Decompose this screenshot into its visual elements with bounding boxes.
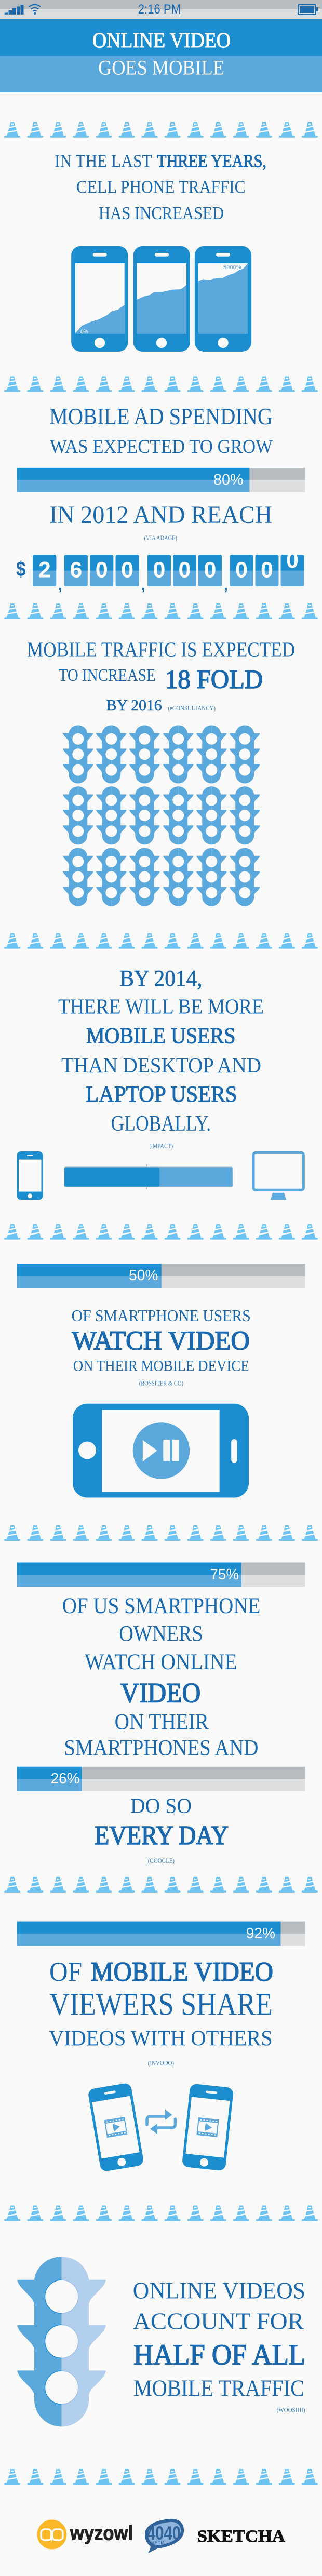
heading: by 2014: LAPTOP USERS bbox=[86, 1082, 237, 1107]
progress bar 80% bbox=[17, 468, 305, 492]
heading: by 2014: MOBILE USERS bbox=[86, 1024, 236, 1048]
counter: $2,600,000,000: 0 bbox=[204, 558, 216, 583]
text: half of all mobile traffic: ACCOUNT FOR bbox=[133, 2308, 304, 2334]
progress bar 50% bbox=[17, 1264, 305, 1288]
counter: $2,600,000,000: 6 bbox=[70, 558, 82, 583]
heading: 18 fold bbox=[27, 638, 295, 714]
source: wooshii: (WOOSHII) bbox=[277, 2406, 305, 2414]
text: watch online video: ON THEIR bbox=[115, 1710, 209, 1735]
counter: $2,600,000,000: 0 bbox=[235, 558, 248, 583]
title line 1: ONLINE VIDEO bbox=[92, 28, 231, 52]
heading: three years: HAS INCREASED bbox=[99, 203, 224, 223]
icon: sharing phones with swap arrows bbox=[87, 2083, 234, 2172]
text: do so every day: EVERY DAY bbox=[95, 1821, 229, 1850]
counter: $2,600,000,000: 0 bbox=[121, 558, 133, 583]
source: rossiter and co: (ROSSITER & CO) bbox=[139, 1379, 183, 1387]
progress bar 26%: 26% bbox=[51, 1770, 79, 1787]
logo: 4040 media: MEDIA bbox=[151, 2540, 165, 2545]
counter: $2,600,000,000: 0 bbox=[261, 558, 273, 583]
heading: three years: IN THE LAST bbox=[55, 151, 152, 171]
logo: sketcha: SKETCHA bbox=[197, 2527, 285, 2546]
counter: $2,600,000,000: 0 bbox=[286, 548, 299, 573]
counter: $2,600,000,000: , bbox=[141, 577, 145, 593]
progress bar 80%: 80% bbox=[213, 472, 243, 488]
heading: by 2014: THAN DESKTOP AND bbox=[61, 1053, 261, 1077]
title line 2: GOES MOBILE bbox=[98, 56, 224, 79]
counter: $2,600,000,000: 0 bbox=[153, 558, 165, 583]
status bar bbox=[0, 0, 322, 19]
heading: mobile video viewers share: VIDEOS WITH OTHERS bbox=[49, 2027, 273, 2050]
cone divider 4 bbox=[4, 933, 318, 949]
cone divider 3 bbox=[4, 603, 318, 619]
three phones traffic chart bbox=[71, 246, 251, 352]
heading: mobile video viewers share: MOBILE VIDEO bbox=[91, 1957, 273, 1987]
swap arrows bbox=[147, 2110, 176, 2134]
cone divider 9 bbox=[4, 2469, 318, 2485]
heading: mobile ad spending: WAS EXPECTED TO GROW bbox=[50, 436, 273, 458]
source: google: (GOOGLE) bbox=[148, 1857, 175, 1864]
heading: three years: CELL PHONE TRAFFIC bbox=[76, 177, 245, 197]
right tilted phone bbox=[182, 2084, 234, 2171]
logo: wyzowl bbox=[37, 2520, 133, 2549]
cone divider 5 bbox=[4, 1224, 318, 1240]
text: half of all mobile traffic: ONLINE VIDEOS bbox=[133, 2277, 305, 2303]
source: via adage: (VIA ADAGE) bbox=[144, 534, 177, 542]
counter: $2,600,000,000: , bbox=[58, 577, 62, 593]
text: watch online video: OF US SMARTPHONE bbox=[62, 1594, 260, 1618]
text: watch online video bbox=[62, 1594, 260, 1761]
progress bar 50%: 50% bbox=[129, 1267, 158, 1284]
title banner bbox=[0, 19, 322, 92]
heading: three years: THREE YEARS, bbox=[157, 151, 266, 171]
cone divider 1 bbox=[4, 122, 318, 138]
cone divider 8 bbox=[4, 2205, 318, 2221]
heading: mobile video viewers share: OF bbox=[49, 1957, 82, 1987]
heading: three years bbox=[55, 151, 266, 223]
progress bar 92%: 92% bbox=[246, 1925, 275, 1942]
text: half of all mobile traffic bbox=[133, 2277, 305, 2401]
heading: mobile video viewers share bbox=[49, 1957, 273, 2050]
heading: watch video: WATCH VIDEO bbox=[72, 1326, 250, 1356]
counter: $2,600,000,000: 2 bbox=[38, 558, 51, 583]
counter: $2,600,000,000: , bbox=[224, 577, 228, 593]
icon: battery bbox=[298, 5, 318, 15]
status time: 2:16 PM bbox=[138, 2, 181, 17]
heading: watch video: OF SMARTPHONE USERS bbox=[72, 1306, 251, 1325]
text: watch online video: SMARTPHONES AND bbox=[64, 1736, 258, 1761]
counter: $2,600,000,000 bbox=[17, 555, 304, 592]
icon: large traffic light bbox=[17, 2257, 106, 2426]
counter: $2,600,000,000: 0 bbox=[179, 558, 191, 583]
phone 5000% bbox=[195, 246, 251, 352]
heading: watch video: ON THEIR MOBILE DEVICE bbox=[73, 1358, 249, 1374]
heading: mobile ad spending bbox=[49, 404, 273, 458]
cone divider 7 bbox=[4, 1877, 318, 1893]
text: half of all mobile traffic: MOBILE TRAFFIC bbox=[133, 2376, 304, 2401]
heading: 18 fold: 18 FOLD bbox=[165, 665, 263, 694]
phone mid bbox=[133, 246, 190, 352]
phone 0%: 0% bbox=[81, 329, 88, 335]
source: impact: (iMPACT) bbox=[150, 1142, 173, 1150]
text: watch online video: WATCH ONLINE bbox=[85, 1650, 237, 1674]
text: do so every day: DO SO bbox=[130, 1794, 192, 1818]
progress bar 75% bbox=[17, 1562, 305, 1587]
text: watch online video: VIDEO bbox=[120, 1678, 200, 1709]
heading: by 2014: THERE WILL BE MORE bbox=[58, 994, 264, 1018]
source: invodo: (INVODO) bbox=[148, 2059, 174, 2067]
logo: wyzowl: wyzowl bbox=[70, 2523, 133, 2545]
text: watch online video: OWNERS bbox=[119, 1621, 203, 1646]
phone 5000%: 5000% bbox=[223, 264, 242, 271]
heading: 18 fold: (eCONSULTANCY) bbox=[168, 704, 216, 712]
icon: wifi bbox=[29, 5, 41, 14]
progress bar 75%: 75% bbox=[210, 1566, 239, 1583]
icon: signal bars bbox=[5, 5, 23, 15]
text: half of all mobile traffic: HALF OF ALL bbox=[133, 2339, 305, 2371]
cone divider 2 bbox=[4, 376, 318, 392]
heading: mobile video viewers share: VIEWERS SHARE bbox=[49, 1987, 273, 2022]
cone divider 6 bbox=[4, 1525, 318, 1541]
heading: by 2014: BY 2014, bbox=[119, 965, 203, 991]
progress bar 26% bbox=[17, 1767, 305, 1791]
text: do so every day bbox=[95, 1794, 229, 1850]
icon: small phone bbox=[17, 1151, 43, 1200]
left tilted phone bbox=[87, 2083, 144, 2172]
logo: 4040 media bbox=[145, 2519, 184, 2553]
heading: by 2014 bbox=[58, 965, 264, 1136]
counter: $2,600,000,000: $ bbox=[16, 558, 25, 581]
heading: 18 fold: BY 2016 bbox=[106, 696, 162, 714]
heading: 18 fold: TO INCREASE bbox=[59, 666, 156, 685]
counter: $2,600,000,000: 0 bbox=[96, 558, 108, 583]
icon: landscape phone with play button bbox=[73, 1404, 249, 1498]
heading: in 2012 and reach: IN 2012 AND REACH bbox=[49, 501, 272, 529]
heading: watch video bbox=[72, 1306, 251, 1374]
heading: by 2014: GLOBALLY. bbox=[111, 1112, 211, 1136]
progress bar 92% bbox=[17, 1922, 305, 1946]
comparison slider bbox=[64, 1164, 233, 1189]
phone 0% bbox=[71, 246, 128, 352]
icon: desktop monitor bbox=[253, 1153, 303, 1200]
logo: 4040 media: 4040 bbox=[147, 2523, 181, 2544]
traffic light grid bbox=[63, 725, 260, 906]
heading: mobile ad spending: MOBILE AD SPENDING bbox=[49, 404, 273, 430]
